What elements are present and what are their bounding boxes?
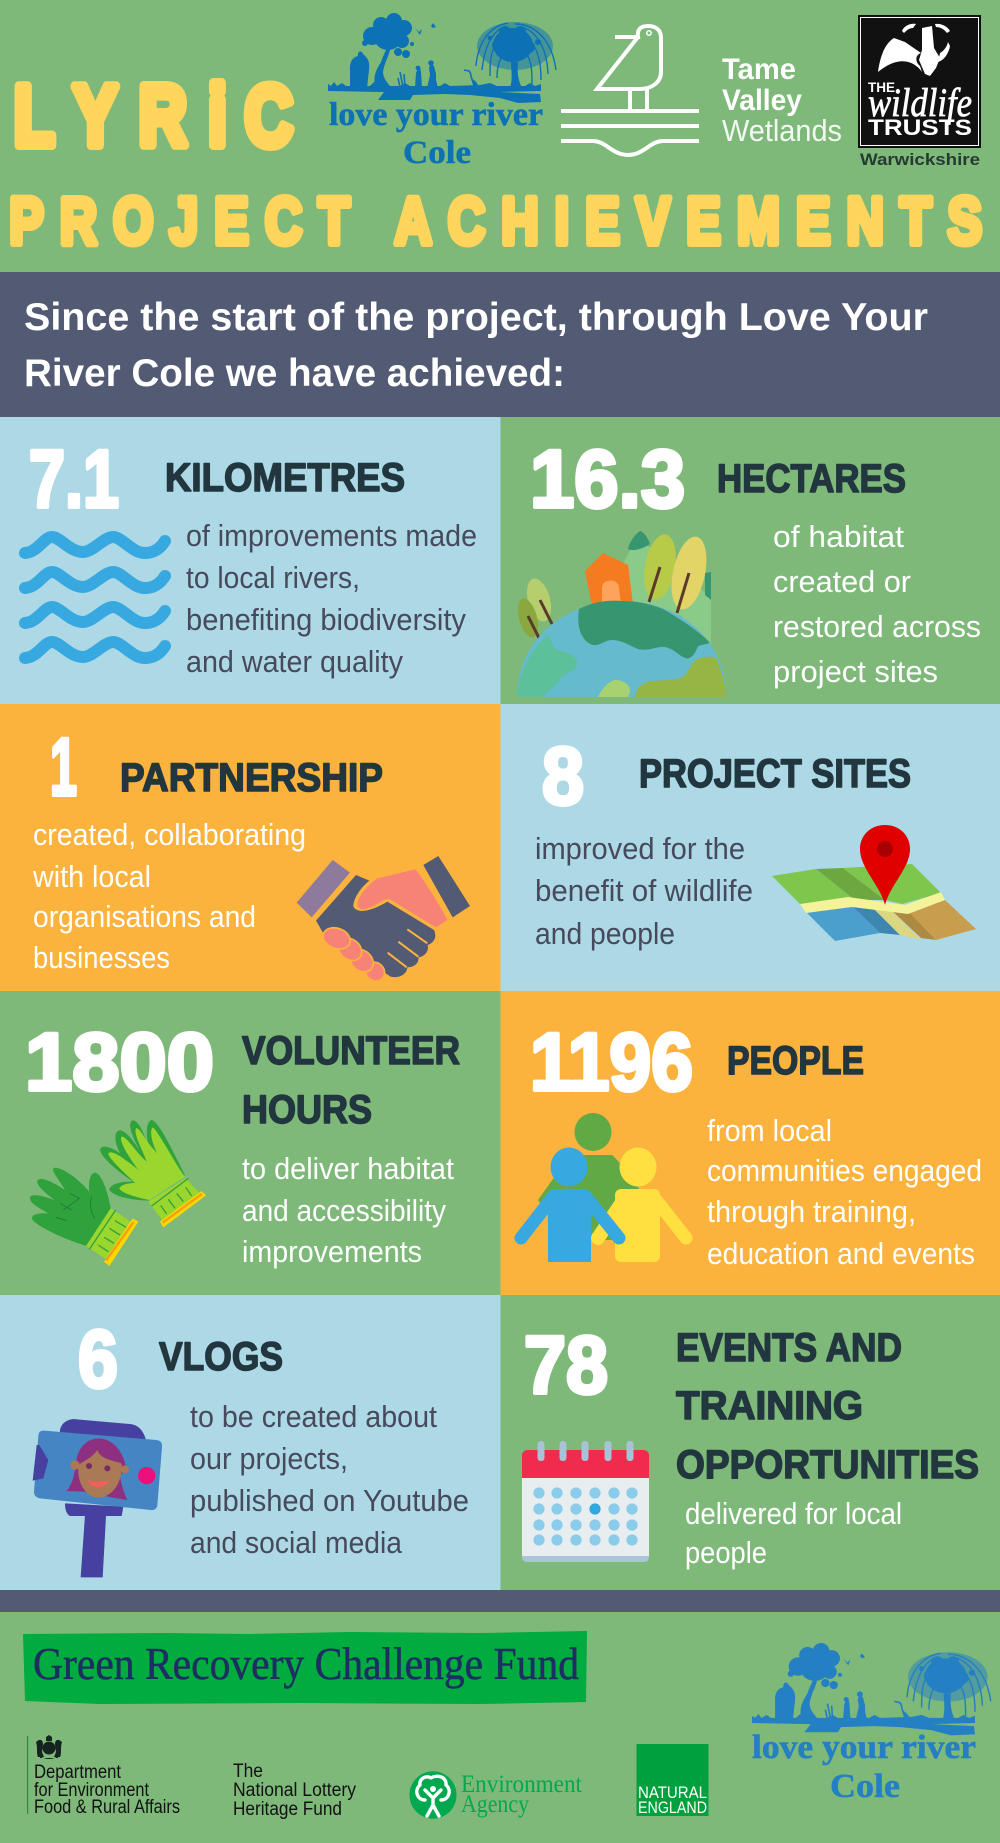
panel: kilometres: 7.1: [29, 434, 119, 525]
panel: partnership: PARTNERSHIP: [120, 756, 383, 800]
panel: project sites: benefit of wildlife: [535, 873, 753, 908]
panel: hectares: of habitat: [773, 519, 904, 554]
logo: National Lottery Heritage Fund: National Lottery: [233, 1780, 356, 1801]
logo: Love Your River Cole footer: Cole: [830, 1768, 900, 1805]
panel: people: education and events: [707, 1236, 975, 1271]
panel: kilometres: of improvements made: [186, 518, 477, 553]
logo: Environment Agency: Environment: [461, 1771, 582, 1798]
logo: Love Your River Cole footer: [752, 1643, 991, 1805]
logo: gull and water lines: [561, 26, 699, 155]
panel: vlogs: VLOGS: [159, 1335, 283, 1379]
icon: handshake: [297, 856, 470, 985]
icon: royal crest: [36, 1735, 62, 1759]
logo text: Tame Valley Wetlands: Tame: [722, 53, 796, 86]
logo: Environment Agency: [410, 1771, 582, 1819]
panel: vlogs: [0, 1295, 500, 1590]
icon: gardening gloves: [30, 1120, 206, 1266]
icon: map with pin: [772, 825, 976, 941]
panel: people: from local: [707, 1113, 832, 1148]
icon: group of people: [521, 1113, 686, 1262]
logo: Defra: [27, 1735, 180, 1818]
panel: partnership: organisations and: [33, 899, 256, 934]
intro band: [0, 272, 1000, 417]
panel: people: 1196: [530, 1017, 693, 1108]
banner: Green Recovery Challenge Fund: [23, 1631, 587, 1704]
panel: hectares: [500, 417, 1000, 704]
panel: volunteer hours: [0, 991, 500, 1295]
logo: Natural England: [636, 1744, 708, 1817]
panel: partnership: with local: [32, 859, 151, 894]
panel: kilometres: and water quality: [186, 644, 403, 679]
panel: events and training: delivered for local: [685, 1496, 902, 1531]
panel: kilometres: benefiting biodiversity: [186, 602, 466, 637]
icon: selfie stick: [33, 1419, 162, 1577]
panel: partnership: [0, 704, 500, 991]
logo: Natural England: NATURAL: [638, 1783, 707, 1802]
panel: volunteer hours: VOLUNTEER: [242, 1029, 460, 1073]
logo: The Wildlife Trusts Warwickshire: Warwickshire: [860, 150, 980, 169]
panel: project sites: improved for the: [535, 831, 745, 866]
logo: Environment Agency: Agency: [461, 1791, 529, 1818]
logo: The Wildlife Trusts Warwickshire: THE: [868, 79, 895, 95]
panel: kilometres: [0, 417, 500, 704]
logo: National Lottery Heritage Fund: Heritage Fund: [233, 1799, 342, 1820]
panel: partnership: created, collaborating: [33, 817, 306, 852]
intro band: Since the start of the project, through Love Your: [24, 296, 928, 339]
panel: hectares: HECTARES: [717, 457, 906, 501]
panel: project sites: PROJECT SITES: [639, 752, 911, 796]
panel: volunteer hours: HOURS: [242, 1088, 372, 1132]
panel: people: [500, 991, 1000, 1295]
panel: kilometres: KILOMETRES: [165, 456, 405, 500]
logo: The Wildlife Trusts Warwickshire: [858, 15, 981, 169]
panel: vlogs: published on Youtube: [190, 1483, 469, 1518]
logo: The Wildlife Trusts Warwickshire: wildlife: [868, 80, 972, 125]
icon: badger head: [878, 24, 950, 76]
panel: volunteer hours: and accessibility: [242, 1193, 446, 1228]
intro band: River Cole we have achieved:: [24, 352, 565, 395]
banner: Green Recovery Challenge Fund: Green Recovery Challenge Fund: [33, 1638, 579, 1689]
icon: calendar: [522, 1441, 649, 1562]
panel: events and training: [500, 1295, 1000, 1590]
logo: The Wildlife Trusts Warwickshire: TRUSTS: [868, 115, 972, 140]
panel: hectares: project sites: [773, 654, 938, 689]
panel: volunteer hours: to deliver habitat: [242, 1151, 454, 1186]
panel: vlogs: to be created about: [190, 1399, 437, 1434]
logo: Love Your River Cole footer: love your river: [752, 1729, 976, 1766]
panel: events and training: TRAINING: [676, 1384, 863, 1428]
logo: Defra: Food & Rural Affairs: [34, 1797, 180, 1818]
logo text: Tame Valley Wetlands: [722, 53, 842, 148]
panel: project sites: [500, 704, 1000, 991]
panel: vlogs: 6: [78, 1314, 118, 1405]
panel: project sites: and people: [535, 916, 675, 951]
heading: Project Achievements: PROJECT ACHIEVEMENTS: [9, 183, 982, 258]
icon: earth with trees: [514, 531, 726, 697]
panel: people: PEOPLE: [727, 1039, 864, 1083]
logo text: Tame Valley Wetlands: Wetlands: [722, 113, 842, 148]
logo: Love Your River Cole: [328, 13, 556, 171]
panel: partnership: 1: [50, 722, 77, 813]
panel: hectares: restored across: [773, 609, 981, 644]
icon: water waves: [25, 537, 165, 658]
panel: vlogs: our projects,: [190, 1441, 348, 1476]
logo: Defra: Department: [34, 1762, 122, 1783]
panel: project sites: 8: [542, 731, 584, 822]
logo text: Tame Valley Wetlands: Valley: [722, 84, 802, 117]
logo: Love Your River Cole: Cole: [403, 135, 471, 171]
panel: events and training: 78: [524, 1320, 608, 1411]
panel: events and training: OPPORTUNITIES: [676, 1443, 979, 1487]
panel: events and training: EVENTS AND: [676, 1326, 902, 1370]
panel: partnership: businesses: [33, 940, 170, 975]
logo: National Lottery Heritage Fund: The: [233, 1761, 263, 1782]
panel: events and training: people: [685, 1535, 767, 1570]
title: LYRiC: LYRiC: [14, 69, 293, 164]
panel: people: through training,: [707, 1194, 916, 1229]
divider band: [0, 1590, 1000, 1612]
panel: volunteer hours: improvements: [242, 1234, 422, 1269]
panel: hectares: 16.3: [530, 434, 685, 525]
panel: kilometres: to local rivers,: [186, 560, 360, 595]
panel: vlogs: and social media: [190, 1525, 403, 1560]
logo: Natural England: ENGLAND: [638, 1798, 707, 1817]
panel: volunteer hours: 1800: [25, 1017, 214, 1108]
logo: National Lottery Heritage Fund: [233, 1761, 356, 1820]
logo: Defra: for Environment: [34, 1780, 150, 1801]
panel: hectares: created or: [773, 564, 911, 599]
logo: Love Your River Cole: love your river: [329, 97, 543, 133]
